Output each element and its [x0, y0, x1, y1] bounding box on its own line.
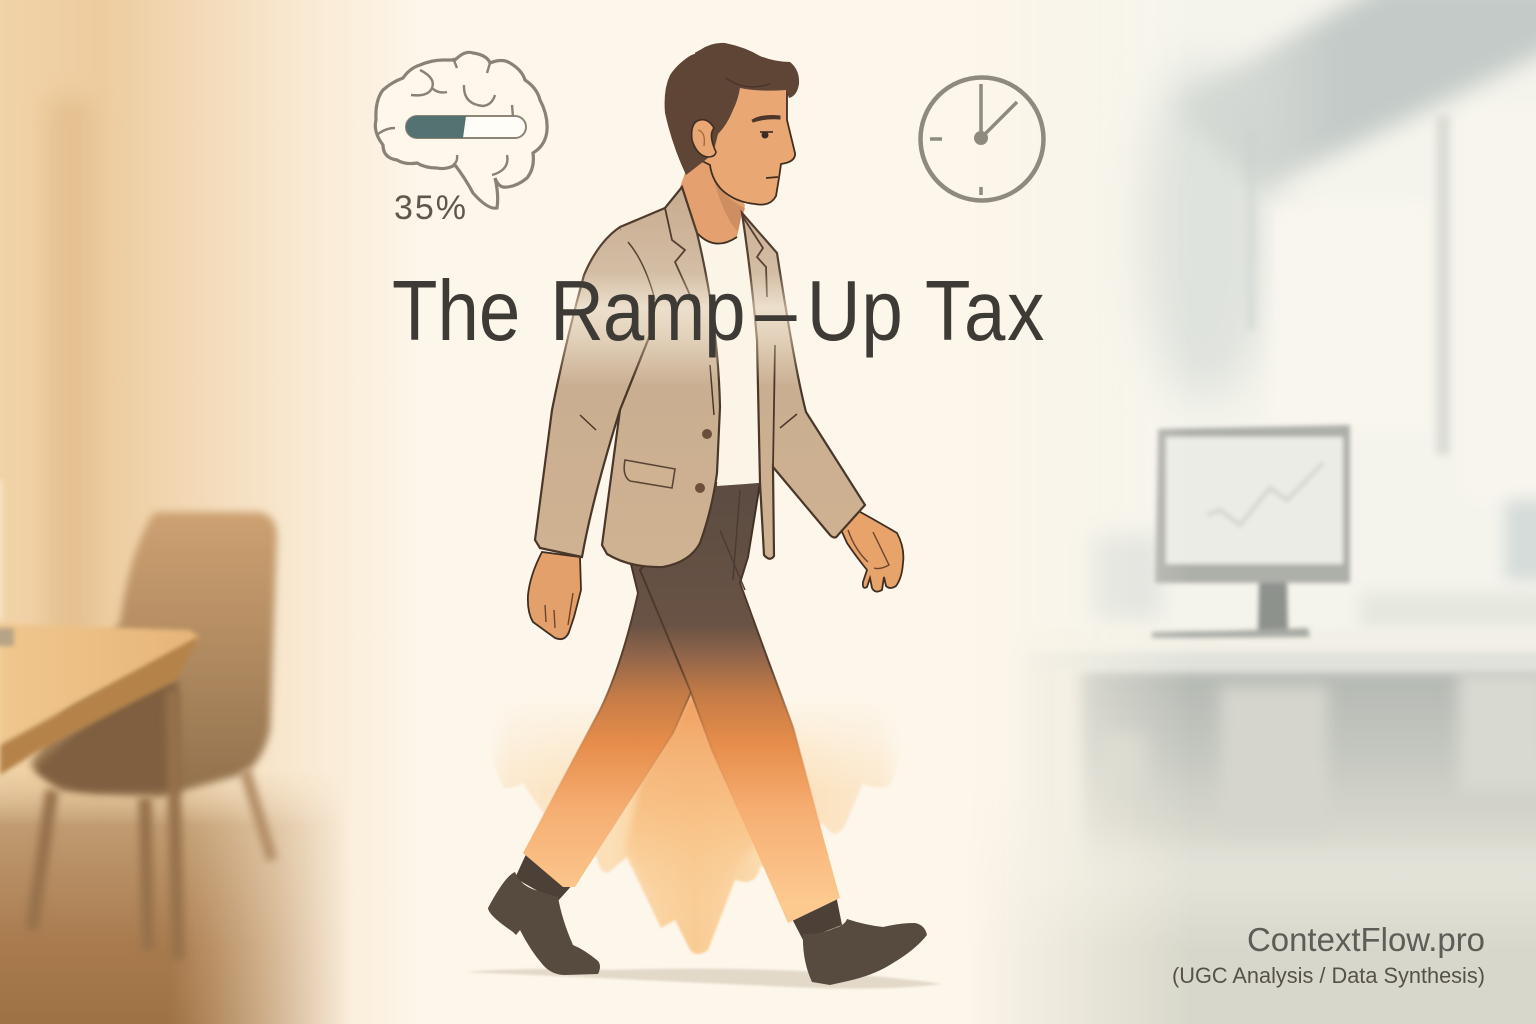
brand credit: ContextFlow.pro [1247, 922, 1485, 959]
mouth [766, 177, 778, 178]
title: The [392, 263, 541, 358]
white tee [697, 213, 760, 486]
ground shadow [465, 969, 942, 989]
front leg [640, 483, 840, 923]
warm grey floor under the desk [1024, 852, 1536, 1024]
brain icon with 35% progress bar [375, 52, 547, 227]
left hand [528, 552, 581, 639]
progress bar fill [406, 116, 466, 138]
flame-like orange energy drain behind the legs [485, 680, 905, 954]
right shoe and sock [790, 890, 927, 985]
title: – [755, 263, 797, 358]
jacket: right panel and sleeve [742, 213, 865, 559]
clock icon [920, 78, 1044, 200]
ear [692, 120, 716, 157]
eye [762, 132, 768, 138]
title: Tax [925, 263, 1046, 358]
title: Ramp [550, 263, 745, 358]
head and face [665, 43, 799, 205]
right hand [838, 508, 903, 592]
jacket: left front panel [602, 187, 720, 567]
jacket: lapels [665, 208, 767, 297]
walking person [488, 43, 927, 985]
background scene: blurred cool office with monitor and desk [960, 0, 1536, 1024]
background scene: blurred warm room with chair and table [0, 0, 420, 1024]
title: Up [807, 263, 925, 358]
source note: (UGC Analysis / Data Synthesis) [1172, 963, 1485, 988]
jacket pocket [624, 460, 675, 488]
back leg [523, 540, 720, 887]
icon: blurred desktop monitor [1152, 425, 1350, 638]
jacket buttons [695, 429, 712, 493]
hair [665, 43, 799, 175]
eyebrow [752, 116, 780, 122]
neck [680, 155, 745, 243]
jacket: crease lines [580, 242, 797, 430]
left shoe and sock [488, 850, 600, 975]
jacket: left sleeve [535, 227, 655, 557]
label: 35%: 35% [394, 189, 466, 227]
progress bar track [406, 116, 526, 138]
